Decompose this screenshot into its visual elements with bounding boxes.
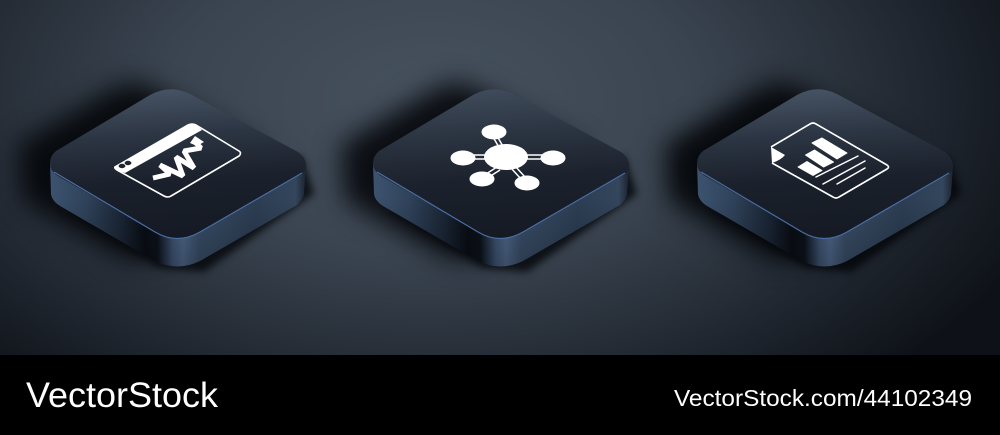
- tile 3 rim highlight: [701, 172, 949, 238]
- tile 2 contact shadow: [387, 156, 637, 272]
- icon: browser window with zigzag chart: [115, 124, 240, 197]
- tile 3 side wall shading: [697, 150, 953, 266]
- tile 2 top face: [373, 89, 629, 238]
- image id text: VectorStock.com/44102349: [674, 385, 972, 411]
- tile 1 contact shadow: [64, 156, 314, 272]
- tile 2 side wall: [373, 150, 629, 266]
- tile 2 cast shadow: [341, 83, 589, 260]
- tile 1 side wall: [50, 150, 306, 266]
- panel: tile with network hub icon: [341, 83, 637, 272]
- tile 1 side wall shading: [50, 150, 306, 266]
- icon: document with bars: [771, 123, 888, 198]
- tile 3 contact shadow: [711, 156, 961, 272]
- tile 3 side wall: [697, 150, 953, 266]
- tile 3 top face: [697, 89, 953, 238]
- icon: network hub: [450, 124, 566, 190]
- tile 2 side wall shading: [373, 150, 629, 266]
- tile 1 top face: [50, 89, 306, 238]
- tile 3 cast shadow: [665, 83, 913, 260]
- footer bar: [0, 355, 1000, 435]
- tile 2 rim highlight: [377, 172, 625, 238]
- panel: tile with document report icon: [665, 83, 961, 272]
- tile 1 rim highlight: [54, 172, 302, 238]
- logo text: VectorStock: [26, 376, 219, 415]
- tile 1 cast shadow: [18, 83, 266, 260]
- panel: tile with browser chart icon: [18, 83, 314, 272]
